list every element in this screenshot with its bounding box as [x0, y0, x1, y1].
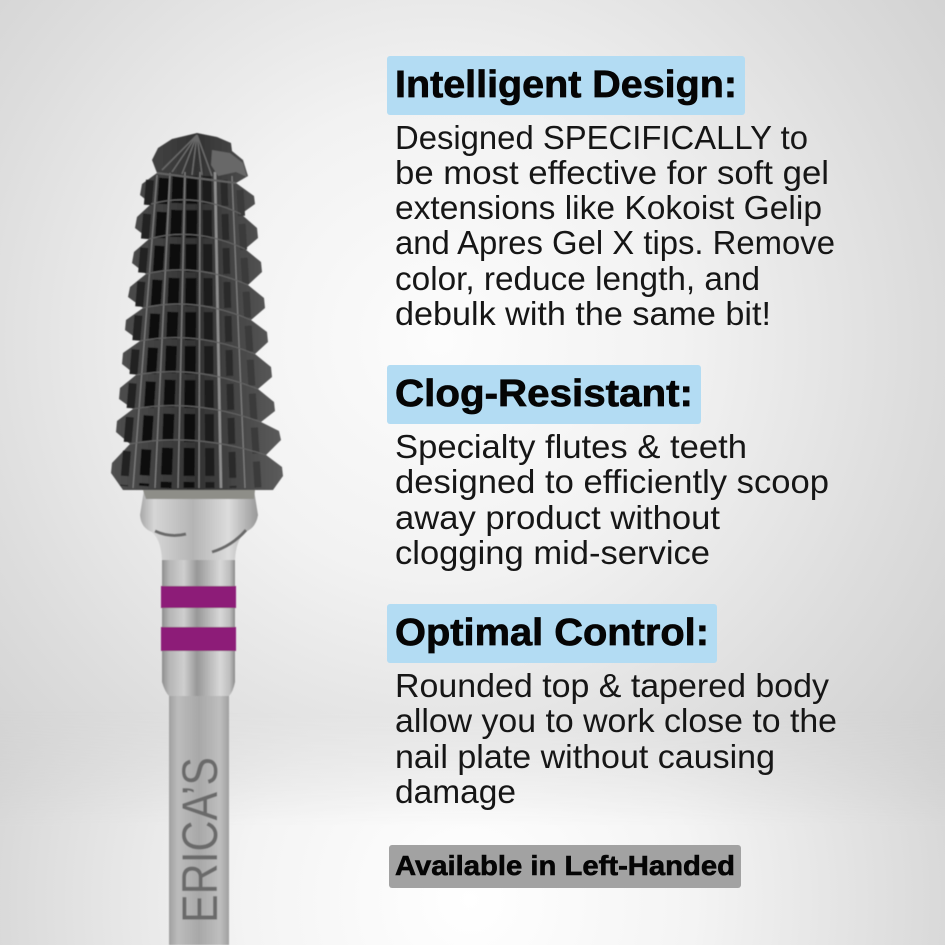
domed tip ribs: [162, 135, 212, 176]
fluted carbide head: [111, 133, 283, 490]
text block: intelligent design: debulk with the same bit!: [395, 295, 771, 332]
panel: clog-resistant: [387, 365, 829, 571]
text block: clog-resistant: clogging mid-service: [395, 534, 710, 571]
text block: intelligent design: [395, 119, 835, 332]
heading: intelligent design: [387, 56, 745, 115]
text block: optimal control: damage: [395, 773, 516, 810]
engraved brand name: ERICA’S: [172, 757, 228, 923]
text block: clog-resistant: designed to efficiently scoop: [395, 463, 829, 500]
heading: optimal control: [387, 604, 717, 663]
dark flute cells: [124, 176, 258, 488]
bit neck: [162, 555, 235, 696]
text block: intelligent design: and Apres Gel X tips. Remove: [395, 224, 835, 261]
product image: carbide nail drill bit: [111, 133, 283, 945]
worn highlight on tip: [211, 150, 247, 177]
text block: optimal control: [395, 667, 837, 810]
light flute edges: [133, 172, 245, 488]
heading: optimal control: Optimal Control:: [395, 612, 709, 654]
text block: optimal control: Rounded top & tapered body: [395, 667, 830, 704]
text block: clog-resistant: Specialty flutes & teeth: [395, 428, 747, 465]
text block: intelligent design: Designed SPECIFICALLY to: [395, 119, 808, 156]
text block: intelligent design: extensions like Kokoist Gelip: [395, 189, 822, 226]
text block: intelligent design: be most effective for soft gel: [395, 154, 829, 191]
heading: clog-resistant: [387, 365, 701, 424]
bit collar: [140, 490, 258, 560]
text block: optimal control: allow you to work close to the: [395, 702, 837, 739]
text block: clog-resistant: away product without: [395, 499, 720, 536]
heading: intelligent design: Intelligent Design:: [395, 64, 737, 106]
callout: available in left-handed: Available in Left-Handed: [395, 850, 735, 881]
text block: clog-resistant: [395, 428, 829, 571]
horizontal tooth grooves: [130, 173, 266, 455]
grit colour bands: [161, 586, 236, 651]
panel: optimal control: [387, 604, 837, 810]
heading: clog-resistant: Clog-Resistant:: [395, 373, 693, 415]
text block: intelligent design: color, reduce length, and: [395, 260, 760, 297]
text block: optimal control: nail plate without causing: [395, 738, 775, 775]
bit shank with engraved text: [169, 680, 229, 945]
callout: available in left-handed: [389, 845, 741, 888]
panel: intelligent design: [387, 56, 835, 332]
